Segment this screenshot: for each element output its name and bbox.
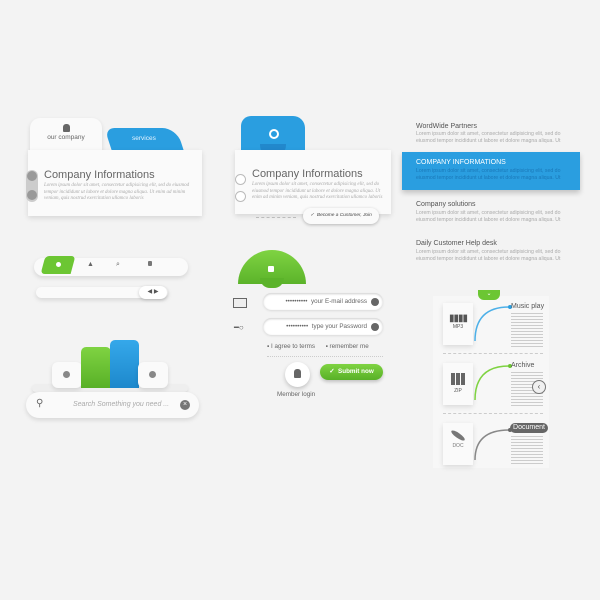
card: MP3: ▮▮▮▮	[449, 313, 467, 324]
item: worldwide: WordWide Partners	[416, 123, 477, 130]
panel: file timeline: Archive	[511, 362, 534, 369]
card: DOC	[443, 423, 473, 465]
panel: tabs and slider: ◀ ▶	[148, 289, 158, 295]
panel: right menu list: Lorem ipsum dolor sit amet, consectetur adipisicing elit, sed do eiusmod tempor incididunt ut labore et dolore magna aliqua. Ut	[416, 210, 560, 223]
card: MP3	[443, 303, 473, 345]
tab: search blue	[241, 116, 305, 152]
field: password: •••••••••• type your Password	[286, 323, 367, 330]
panel: company info tabs	[26, 124, 204, 220]
field: email: •••••••••• your E-mail address	[285, 298, 367, 305]
heading: Company Informations	[44, 169, 155, 181]
tab: green: ⌄	[486, 291, 492, 297]
card: MP3: MP3	[453, 324, 463, 330]
checkboxes: ▪ I agree to terms ▪ remember me	[267, 343, 369, 350]
item: help desk: Daily Customer Help desk	[416, 240, 497, 247]
icon: up/down circles	[26, 170, 38, 202]
tab: services	[104, 128, 184, 150]
slider	[36, 287, 168, 298]
panel: right menu list	[400, 122, 582, 262]
search bar: ×	[183, 401, 187, 408]
panel: right menu list: Lorem ipsum dolor sit amet, consectetur adipisicing elit, sed do eiusmod tempor incididunt ut labore et dolore magna aliqua. Ut	[416, 168, 560, 181]
panel: right menu list: COMPANY INFORMATIONS	[416, 159, 506, 166]
tab: our company	[30, 118, 102, 152]
panel: file timeline: Music play	[511, 303, 544, 310]
item: blue band	[402, 152, 580, 190]
heading: Company Informations	[252, 168, 363, 180]
tab: services: services	[132, 135, 156, 142]
search bar: ⚲	[36, 398, 43, 409]
card: ZIP: ZIP	[454, 388, 462, 394]
panel: right menu list: Lorem ipsum dolor sit amet, consectetur adipisicing elit, sed do eiusmod tempor incididunt ut labore et dolore magna aliqua. Ut	[416, 249, 560, 262]
field: email	[263, 293, 383, 310]
search bar	[26, 392, 199, 418]
text: Lorem ipsum dolor sit amet, consectetur adipisicing elit, sed do eiusmod tempor incididunt ut labore et dolore magna aliqua. Ut enim ad minim veniam, quis nostrud exercitation ullamco laboris	[252, 182, 382, 200]
card: ZIP	[443, 363, 473, 405]
icon: arrow circle	[532, 380, 546, 394]
panel: company info search	[234, 116, 392, 227]
panel: file timeline	[442, 290, 548, 468]
body	[235, 150, 391, 214]
tab: our company: our company	[47, 134, 85, 141]
panel: tabs and slider: ▲	[87, 261, 94, 268]
icon: key: ━○	[234, 323, 244, 332]
panel: tabs and slider	[33, 256, 189, 302]
panel body	[28, 150, 202, 216]
panel: file timeline: Document	[513, 424, 545, 431]
button: submit: ✓ Submit now	[329, 368, 374, 375]
field: password	[263, 318, 383, 335]
button: submit	[320, 364, 383, 380]
search bar: Search Something you need ...	[73, 401, 169, 408]
item: solutions: Company solutions	[416, 201, 476, 208]
panel: tabs and slider: ⌕	[116, 261, 120, 268]
icon: arrow circle: ‹	[538, 382, 540, 391]
button: become a customer: ✓ Become a Customer, Join	[310, 213, 372, 218]
chart: bars	[32, 340, 188, 393]
tab: green	[478, 290, 500, 300]
panel: login form	[233, 250, 384, 398]
icon: green lock dome	[238, 250, 306, 284]
button: become a customer	[303, 208, 379, 224]
icon: envelope	[233, 298, 247, 308]
tab: green	[41, 256, 75, 274]
panel: login form: Member login	[277, 391, 315, 398]
icon: member	[285, 362, 310, 387]
panel: right menu list: Lorem ipsum dolor sit amet, consectetur adipisicing elit, sed do eiusmod tempor incididunt ut labore et dolore magna aliqua. Ut	[416, 131, 560, 144]
icon: magnifier	[269, 129, 279, 139]
card: DOC: DOC	[452, 443, 464, 449]
text: Lorem ipsum dolor sit amet, consectetur adipisicing elit, sed do eiusmod tempor incididunt ut labore et dolore magna aliqua. Ut enim ad minim veniam, quis nostrud exercitation ullamco laboris	[44, 183, 189, 201]
icons: circles	[235, 174, 246, 202]
